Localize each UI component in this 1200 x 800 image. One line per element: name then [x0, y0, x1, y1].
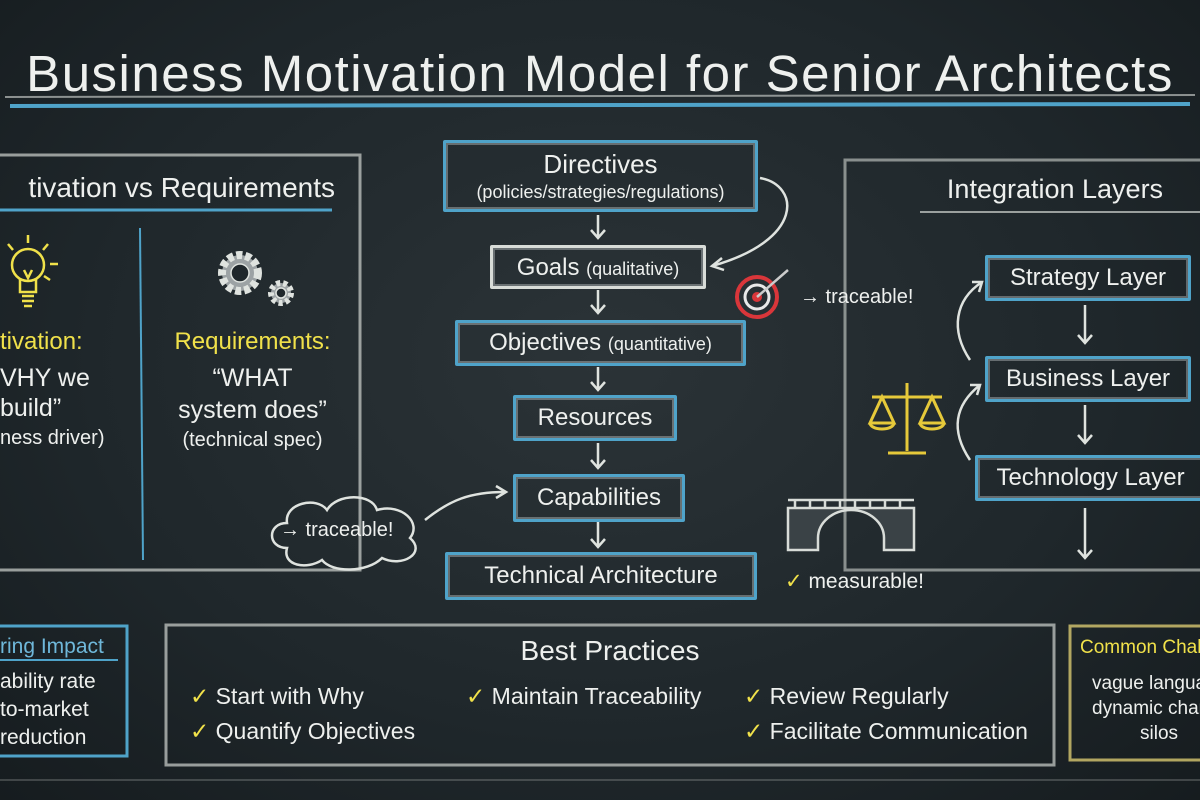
panel: measuring impact: to-market	[0, 698, 89, 721]
panel: motivation vs requirements: “WHAT	[212, 364, 293, 392]
text: measurable: ✓ measurable!	[785, 570, 924, 593]
chain: technical architecture	[445, 552, 757, 600]
panel: best practices: ✓ Review Regularly	[744, 683, 949, 709]
chain: objectives	[455, 320, 746, 366]
chain: capabilities: Capabilities	[537, 484, 661, 511]
panel: measuring impact: reduction	[0, 726, 86, 749]
panel: integration layers: Business Layer	[1006, 365, 1170, 392]
chain: goals	[490, 245, 706, 289]
panel: best practices: ✓ Facilitate Communication	[744, 718, 1028, 744]
panel: best practices: ✓ Maintain Traceability	[466, 683, 701, 709]
panel: motivation vs requirements: VHY we	[0, 364, 90, 392]
chain: technical architecture: Technical Architecture	[484, 562, 718, 589]
callout: cloud traceable	[270, 496, 417, 571]
chain: resources	[513, 395, 677, 441]
panel: best practices: Best Practices	[521, 635, 699, 666]
panel: best practices: ✓ Start with Why	[190, 683, 364, 709]
bottom frames	[0, 626, 127, 756]
panel: motivation vs requirements: ness driver)	[0, 427, 104, 449]
panel: measuring impact: ability rate	[0, 670, 96, 693]
panel: measuring impact	[0, 635, 104, 749]
panel: best practices	[190, 635, 1028, 744]
chain: directives: (policies/strategies/regulations)	[476, 182, 725, 202]
panel: common challenges: silos	[1140, 723, 1178, 744]
panel: measuring impact: ring Impact	[0, 635, 104, 658]
text: requirements: Requirements:	[174, 328, 331, 355]
panel: motivation vs requirements: (technical spec)	[182, 429, 323, 451]
text: motivation: tivation:	[0, 328, 83, 355]
panel: integration layers	[947, 174, 1200, 501]
chain: resources: Resources	[538, 404, 652, 431]
chain: objectives: Objectives (quantitative)	[489, 329, 712, 356]
chain: capabilities	[513, 474, 685, 522]
chain: directives: Directives	[543, 149, 658, 179]
callout: cloud traceable: → traceable!	[280, 519, 393, 541]
panel: motivation vs requirements: system does”	[178, 396, 327, 424]
heading: tivation vs Requirements	[28, 172, 335, 203]
title: Business Motivation Model for Senior Architects	[26, 45, 1174, 102]
icon: target with traceable	[735, 269, 913, 319]
layer boxes: Strategy Layer	[1010, 264, 1166, 291]
icon: target with traceable: → traceable!	[800, 286, 913, 308]
chain: goals: Goals (qualitative)	[517, 254, 679, 281]
icon: bridge	[786, 498, 916, 552]
icon: lightbulb	[7, 235, 58, 308]
panel: common challenges	[1080, 637, 1200, 744]
layer boxes	[985, 255, 1191, 301]
icon: scales	[868, 383, 946, 454]
panel: integration layers: Technology Layer	[996, 464, 1185, 491]
panel: motivation vs requirements: build”	[0, 394, 61, 422]
panel: best practices: ✓ Quantify Objectives	[190, 718, 415, 744]
chain: directives	[443, 140, 758, 212]
left frame	[0, 155, 360, 570]
center arrows	[425, 178, 1092, 558]
right frame	[845, 160, 1200, 570]
heading: Integration Layers	[947, 174, 1163, 204]
icon: gears	[218, 251, 294, 306]
panel: motivation vs requirements	[0, 172, 335, 451]
